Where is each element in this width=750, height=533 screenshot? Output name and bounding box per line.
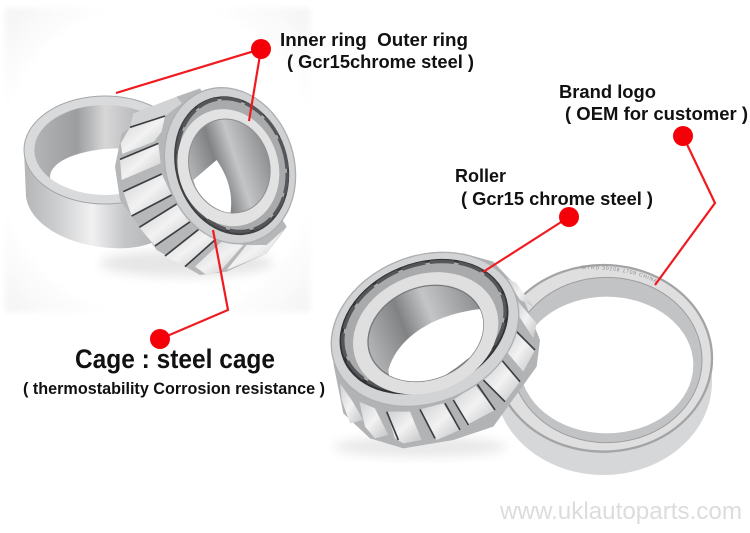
label: inner ring and outer ring: ( Gcr15chrome steel ) [287, 51, 474, 72]
right roller cone [333, 253, 540, 448]
label: cage: ( thermostability Corrosion resistance ) [23, 380, 325, 398]
label: brand logo: Brand logo [559, 81, 656, 102]
label: inner ring and outer ring [280, 29, 474, 72]
photo: right bearing pair [330, 252, 714, 475]
label: roller: ( Gcr15 chrome steel ) [461, 188, 653, 209]
label: roller: Roller [455, 165, 506, 186]
left roller cone [115, 88, 287, 275]
callout lines: cage [160, 230, 228, 339]
watermark: www.uklautoparts.com [499, 498, 742, 525]
label: brand logo [559, 81, 748, 124]
label: cage: Cage : steel cage [75, 344, 275, 374]
left front rim and inner ring [165, 87, 296, 244]
label: inner ring and outer ring: Inner ring Outer ring [280, 29, 468, 50]
label: roller [455, 165, 653, 209]
panel: left photo background [5, 8, 310, 312]
callout line: roller [483, 217, 569, 272]
left outer ring [24, 96, 153, 248]
shadow under right bearing [333, 437, 507, 457]
callout dot: inner ring and outer ring [251, 39, 271, 59]
callout dot: brand logo [673, 126, 693, 146]
callout lines: brand logo [655, 136, 715, 285]
large outer ring [502, 264, 714, 475]
callout lines: inner ring and outer ring [116, 49, 261, 121]
label: brand logo: ( OEM for customer ) [565, 103, 748, 124]
brand marking on ring: WTRD 30208 1708 CHINA [582, 266, 656, 282]
photo: left bearing pair [24, 70, 315, 277]
callout dot: cage [150, 329, 170, 349]
callout dot: roller [559, 207, 579, 227]
right front rim and inner ring [330, 252, 520, 406]
label: cage [23, 344, 325, 398]
shadow under left bearing [100, 250, 273, 277]
